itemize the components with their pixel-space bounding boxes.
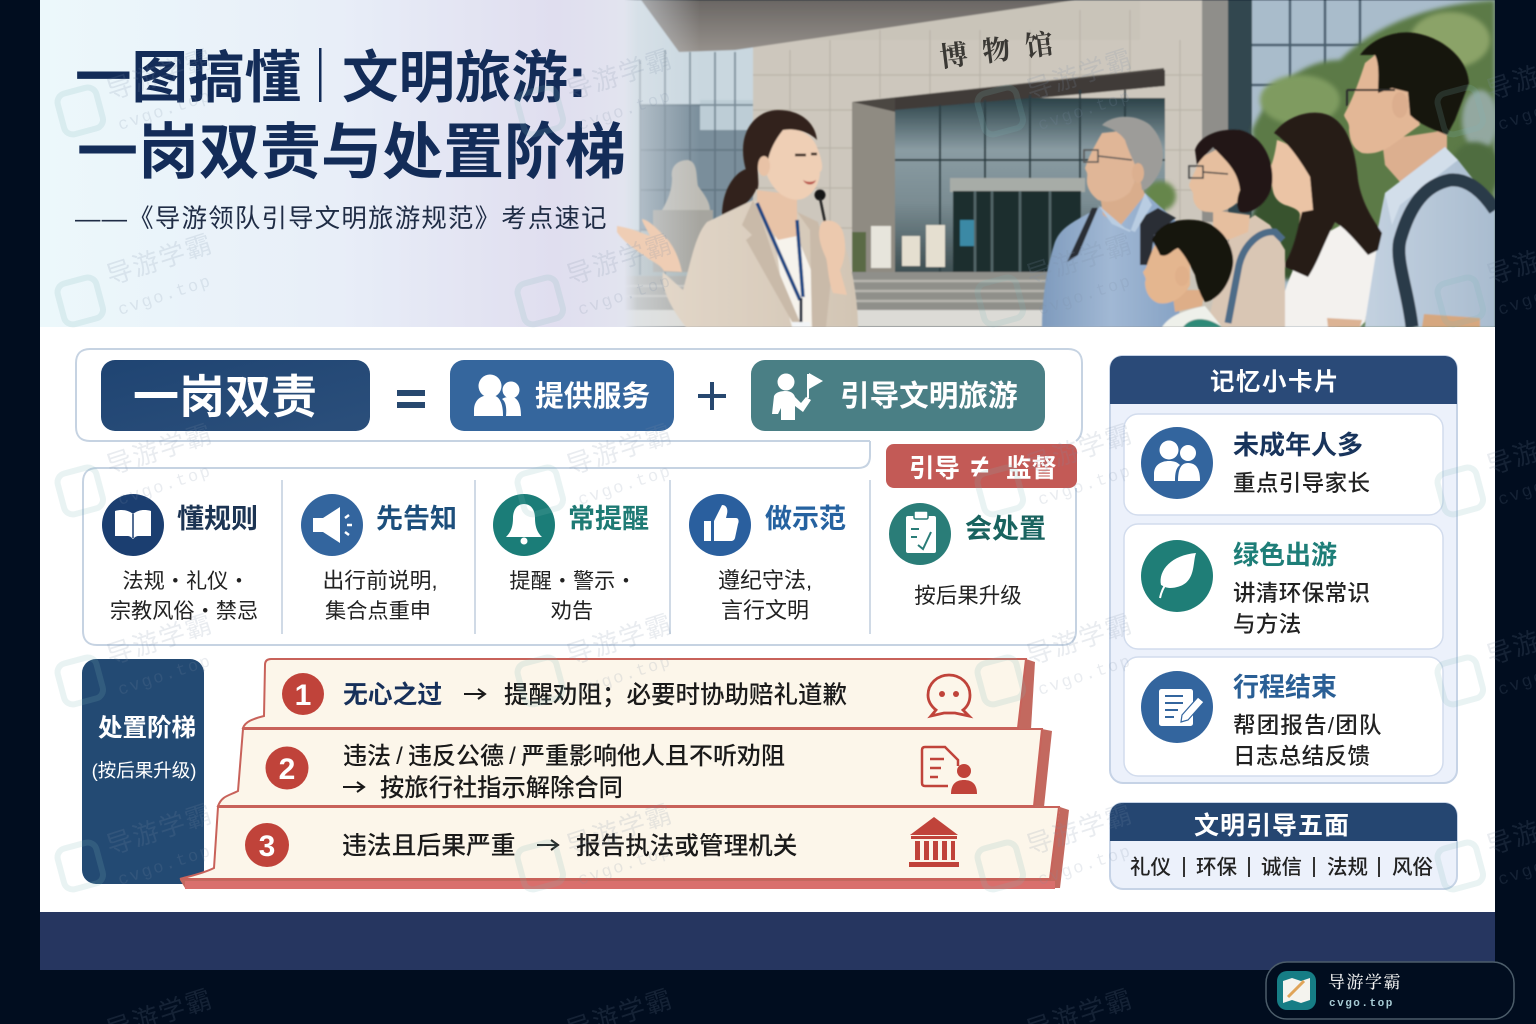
card: green travel: 讲清环保常识: [1233, 581, 1370, 606]
museum building: [600, 0, 1495, 327]
column: know the rules: 法规・礼仪・: [122, 569, 250, 593]
card: green travel: [1124, 524, 1443, 649]
card: green travel: 绿色出游: [1233, 540, 1337, 570]
step 1: 无心之过: [343, 680, 442, 709]
card: many minors: [1124, 414, 1443, 515]
column: inform in advance: [301, 494, 457, 623]
stone lion statue: [653, 160, 713, 272]
panel: one post two duties formula: [76, 349, 1082, 441]
watermark layer: 导游学霸: [563, 608, 676, 671]
young man: [1344, 32, 1495, 327]
column dividers: [282, 480, 870, 634]
panel: handling ladder label: 处置阶梯: [98, 714, 196, 742]
watermark layer: 导游学霸: [1023, 798, 1136, 861]
panel: five aspects of civilised guidance: [1110, 803, 1457, 889]
panel: five guidance actions: [83, 441, 1077, 645]
five aspects list: 礼仪: [1130, 856, 1171, 879]
number badge 3: 3: [259, 830, 275, 863]
watermark layer: cvgo.top: [116, 87, 215, 136]
red tag: guide is not supervise: [886, 444, 1077, 488]
left soft fade behind title: [40, 0, 700, 327]
watermark layer: cvgo.top: [1036, 842, 1135, 891]
step 3: [180, 807, 1069, 889]
step 2: [218, 729, 1052, 807]
watermark layer: cvgo.top: [1036, 652, 1135, 701]
term: provide service: [450, 360, 674, 431]
number badge 1: 1: [295, 679, 311, 712]
watermark layer: cvgo.top: [576, 842, 675, 891]
watermark layer: cvgo.top: [576, 462, 675, 511]
tree foliage: [1144, 0, 1500, 327]
icon: map logo: [1277, 971, 1316, 1010]
column: frequent reminders: 常提醒: [568, 504, 649, 534]
watermark layer: 导游学霸: [1023, 228, 1136, 291]
tourist group figures: [1042, 32, 1495, 327]
column: set an example: 言行文明: [721, 598, 809, 623]
card: end of itinerary: 日志总结反馈: [1233, 744, 1370, 769]
icon: leaf: [1141, 540, 1213, 612]
step 1: 提醒劝阻；必要时协助赔礼道歉: [504, 681, 847, 709]
panel: memory cards: [1110, 356, 1457, 783]
watermark layer: 导游学霸: [103, 43, 216, 106]
watermark layer: 导游学霸: [103, 608, 216, 671]
column: inform in advance: 先告知: [376, 504, 457, 534]
column: inform in advance: 集合点重申: [325, 599, 431, 623]
watermark layer: cvgo.top: [576, 272, 675, 321]
brand badge: 导游学霸: [1328, 973, 1402, 992]
column: frequent reminders: [493, 494, 649, 623]
term: guide civilised travel: [751, 360, 1045, 431]
panel: handling ladder label: (按后果升级): [92, 760, 196, 781]
watermark layer: cvgo.top: [116, 652, 215, 701]
column: set an example: [689, 494, 846, 623]
five aspects header: [1110, 803, 1457, 841]
column: know the rules: 懂规则: [177, 504, 258, 534]
red tag: guide is not supervise: 引导: [909, 455, 960, 483]
subtitle: ——《导游领队引导文明旅游规范》考点速记: [75, 205, 608, 233]
column: handle properly: 按后果升级: [914, 584, 1022, 608]
icon: chat bubble: [928, 675, 970, 716]
column: set an example: 遵纪守法,: [718, 568, 812, 593]
equals sign: [397, 390, 425, 408]
icon: government building: [909, 817, 959, 867]
watermark layer: cvgo.top: [576, 652, 675, 701]
five aspects list: 法规: [1327, 856, 1368, 879]
icon: family: [1141, 427, 1213, 499]
card: end of itinerary: 行程结束: [1233, 672, 1337, 702]
card: many minors: 重点引导家长: [1233, 471, 1370, 496]
watermark layer: 导游学霸: [563, 418, 676, 481]
plus sign: [698, 382, 726, 410]
boy: [1143, 220, 1233, 327]
step 2: 按旅行社指示解除合同: [380, 775, 623, 802]
term: one post two duties: 一岗双责: [133, 371, 317, 423]
header photo: museum scene with guide and tourists: [40, 0, 1500, 327]
watermark layer: 导游学霸: [563, 43, 676, 106]
older man: [1042, 117, 1180, 327]
actions frame: [83, 441, 1076, 645]
column: frequent reminders: 提醒・警示・: [509, 569, 637, 593]
five aspects list: [1130, 856, 1434, 879]
card: end of itinerary: [1124, 657, 1443, 776]
number badge 3: [245, 823, 289, 867]
step 2: 违法 / 违反公德 / 严重影响他人且不听劝阻: [343, 743, 785, 770]
watermark layer: 导游学霸: [1023, 418, 1136, 481]
title line 1 continued: 文明旅游:: [342, 46, 587, 109]
watermark layer: 导游学霸: [1023, 43, 1136, 106]
term: one post two duties: [101, 360, 370, 431]
five aspects list: 环保: [1196, 856, 1238, 879]
brand badge: [1266, 962, 1514, 1019]
watermark layer: 导游学霸: [103, 228, 216, 291]
footer band: [40, 912, 1495, 970]
card: many minors: 未成年人多: [1233, 430, 1363, 460]
watermark layer: cvgo.top: [576, 87, 675, 136]
watermark layer: cvgo.top: [116, 462, 215, 511]
watermark layer: cvgo.top: [1036, 272, 1135, 321]
column: know the rules: 宗教风俗・禁忌: [110, 599, 258, 623]
step 3: 违法且后果严重: [342, 832, 516, 860]
icon: megaphone: [301, 494, 363, 556]
tour guide figure: [617, 110, 858, 327]
column: handle properly: [889, 503, 1046, 608]
arrow: [537, 840, 558, 850]
title line 2: 一岗双责与处置阶梯: [77, 118, 626, 186]
red tag: guide is not supervise: 监督: [1006, 455, 1057, 483]
card: end of itinerary: 帮团报告/团队: [1233, 713, 1383, 738]
brand badge: cvgo.top: [1329, 998, 1394, 1010]
icon: person with flag: [772, 373, 823, 420]
five aspects list: 风俗: [1392, 856, 1434, 879]
memory card header: [1110, 356, 1457, 404]
card: green travel: 与方法: [1233, 612, 1302, 637]
panel: handling ladder steps: [180, 659, 1069, 889]
icon: open book: [102, 494, 164, 556]
title separator: [319, 48, 322, 102]
five aspects header: 文明引导五面: [1194, 812, 1350, 840]
watermark layer: 导游学霸: [103, 798, 216, 861]
watermark layer: cvgo.top: [116, 842, 215, 891]
step 1: [243, 659, 1035, 729]
column: frequent reminders: 劝告: [551, 599, 593, 623]
column: inform in advance: 出行前说明,: [322, 568, 438, 593]
watermark layer: 导游学霸: [1023, 608, 1136, 671]
red tag: guide is not supervise: ≠: [971, 448, 989, 484]
older woman: [1189, 130, 1285, 327]
content sheet: [40, 327, 1495, 912]
number badge 1: [282, 673, 324, 715]
icon: two people: [474, 374, 521, 416]
arrow: [343, 782, 364, 792]
term: provide service: 提供服务: [535, 381, 650, 413]
memory card frame: [1110, 356, 1457, 783]
column: know the rules: [102, 494, 258, 623]
five aspects list: 诚信: [1261, 856, 1302, 879]
icon: thumbs up: [689, 494, 751, 556]
arrow: [464, 689, 485, 699]
icon: document with person: [922, 747, 977, 794]
icon: clipboard check: [889, 503, 951, 565]
watermark layer: 导游学霸: [563, 798, 676, 861]
formula frame: [76, 349, 1082, 441]
memory card header: 记忆小卡片: [1210, 368, 1340, 396]
watermark layer: 导游学霸: [563, 228, 676, 291]
term: guide civilised travel: 引导文明旅游: [840, 380, 1018, 413]
museum sign: 博物馆: [938, 26, 1070, 74]
watermark layer: cvgo.top: [1036, 87, 1135, 136]
watermark layer: cvgo.top: [1036, 462, 1135, 511]
icon: bell: [493, 494, 555, 556]
watermark layer: 导游学霸: [103, 418, 216, 481]
column: handle properly: 会处置: [965, 514, 1046, 544]
title line 1: 一图搞懂: [75, 46, 301, 109]
number badge 2: 2: [279, 753, 295, 786]
five aspects frame: [1110, 803, 1457, 889]
column: set an example: 做示范: [765, 504, 846, 534]
watermark layer: cvgo.top: [116, 272, 215, 321]
young woman: [1268, 113, 1382, 327]
step 3: 报告执法或管理机关: [576, 832, 797, 860]
number badge 2: [266, 746, 308, 790]
panel: handling ladder label: [82, 659, 204, 884]
icon: notebook and pen: [1141, 671, 1213, 743]
